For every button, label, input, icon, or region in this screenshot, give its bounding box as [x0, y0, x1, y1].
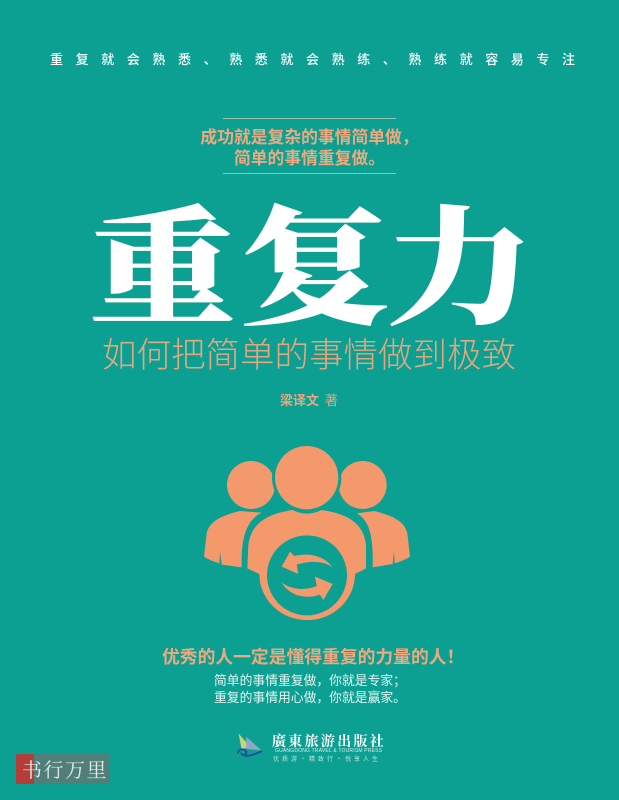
- icon: three people with repeat arrows: [204, 446, 410, 620]
- body line 1: 简单的事情重复做，你就是专家；: [214, 670, 406, 689]
- publisher motto: 优质游·精致行·悦享人生: [273, 754, 381, 763]
- logo mark: [237, 734, 262, 757]
- subtitle: 如何把简单的事情做到极致: [102, 327, 516, 377]
- body line 2: 重复的事情用心做，你就是赢家。: [214, 687, 406, 706]
- quote block with rules: [223, 118, 396, 174]
- publisher english name: GUANGDONG TRAVEL & TOURISM PRESS: [275, 748, 382, 754]
- author: 梁译文 著: [280, 390, 338, 409]
- watermark text: 书行万里: [22, 754, 108, 783]
- title character 3: 力: [386, 165, 533, 351]
- main title: [89, 165, 533, 351]
- watermark: [16, 754, 110, 784]
- slogan: 优秀的人一定是懂得重复的力量的人！: [162, 643, 464, 669]
- title character 2: 复: [240, 165, 390, 351]
- quote line 1: 成功就是复杂的事情简单做，: [200, 124, 419, 148]
- publisher logo: [237, 731, 386, 763]
- top tagline: 重复就会熟悉、熟悉就会熟练、熟练就容易专注: [50, 49, 588, 68]
- quote line 2: 简单的事情重复做。: [234, 145, 385, 169]
- publisher name: 廣東旅游出版社: [272, 731, 386, 751]
- title character 1: 重: [89, 165, 236, 351]
- watermark red block: [16, 754, 34, 784]
